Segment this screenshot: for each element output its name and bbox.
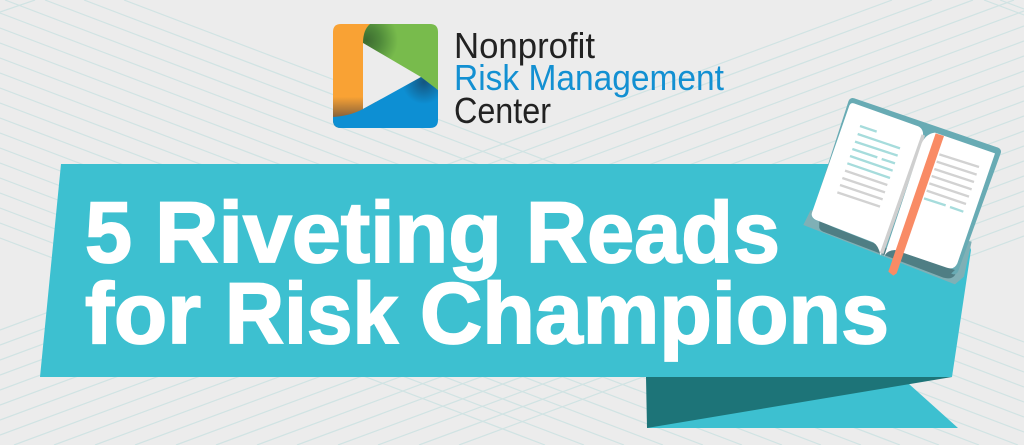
right page xyxy=(884,133,995,268)
ribbon banner xyxy=(40,164,971,377)
title: 5 xyxy=(85,185,132,281)
left page text xyxy=(837,126,900,207)
gutter xyxy=(882,135,923,253)
logo xyxy=(333,24,724,131)
title: Riveting xyxy=(155,185,502,281)
ribbon fold xyxy=(646,377,958,428)
logo wordmark: Center xyxy=(454,90,551,131)
right page text xyxy=(924,154,979,212)
logo mark xyxy=(333,24,438,128)
logo wordmark: Risk Management xyxy=(454,57,724,98)
title: Champions xyxy=(420,266,889,362)
logo wordmark: Nonprofit xyxy=(454,25,595,66)
title: Reads xyxy=(526,185,780,281)
title: for xyxy=(85,266,201,362)
logo wordmark xyxy=(454,25,724,131)
title xyxy=(85,185,889,362)
title: Risk xyxy=(225,266,398,362)
left page xyxy=(812,103,923,256)
icon: open book xyxy=(803,102,997,284)
bookmark ribbon xyxy=(888,133,944,276)
